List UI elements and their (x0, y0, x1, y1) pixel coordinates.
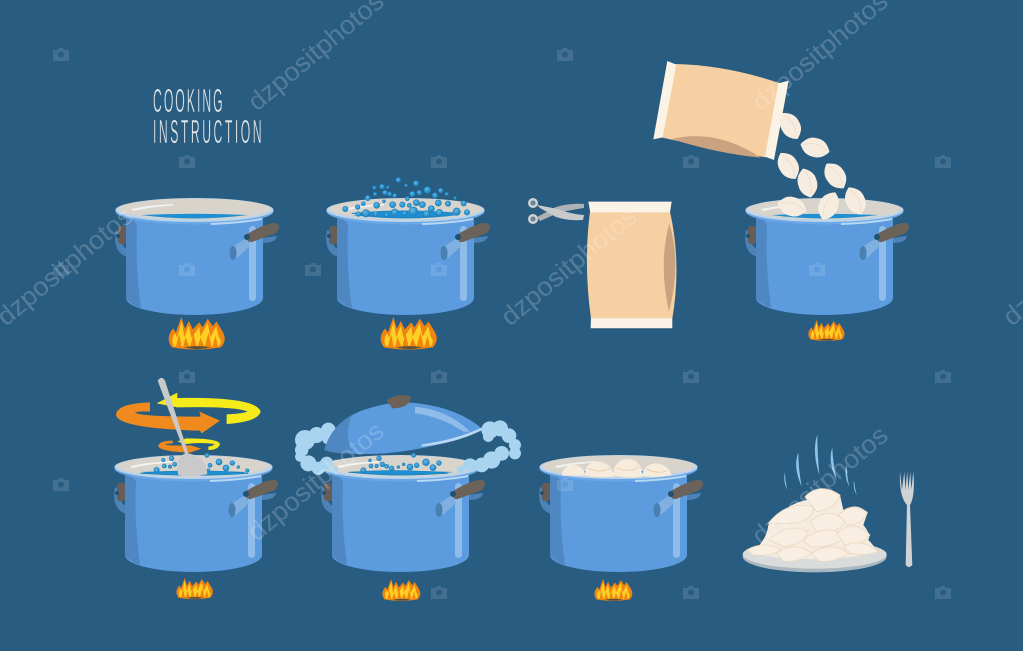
step 2: boiling water pot (326, 178, 490, 349)
bubbles (348, 453, 448, 475)
bag tilted pouring dumplings (653, 61, 789, 160)
scissors (529, 199, 584, 223)
stirring arrows back (116, 402, 220, 433)
dumplings in pot (562, 459, 672, 478)
spoon (158, 378, 207, 476)
step 1: pot of water on burner (115, 198, 279, 349)
watermark layer: dzpositphotos (495, 201, 643, 332)
fork (900, 472, 914, 567)
watermark layer: dzpositphotos (746, 420, 894, 551)
watermark layer: dzpositphotos (242, 416, 390, 547)
plate of dumplings (743, 434, 914, 572)
plate (743, 541, 887, 572)
steam (295, 420, 521, 475)
title (153, 83, 264, 151)
step 6: cooked dumplings in pot (539, 455, 703, 601)
bubbles (140, 453, 249, 475)
title: INSTRUCTION (153, 114, 264, 151)
steam over rim (319, 459, 477, 473)
bubbles (343, 178, 470, 217)
step 5: pot with lid and steam (295, 395, 521, 601)
steam (784, 434, 857, 495)
title: COOKING (153, 83, 225, 120)
dumpling pile (750, 489, 876, 559)
step 3: pot with dumplings falling in (745, 108, 909, 341)
small arrows (158, 441, 201, 453)
lid (324, 402, 482, 454)
step 4: stirring pot (114, 378, 278, 599)
falling dumplings (773, 108, 870, 223)
bag upright (587, 202, 676, 328)
